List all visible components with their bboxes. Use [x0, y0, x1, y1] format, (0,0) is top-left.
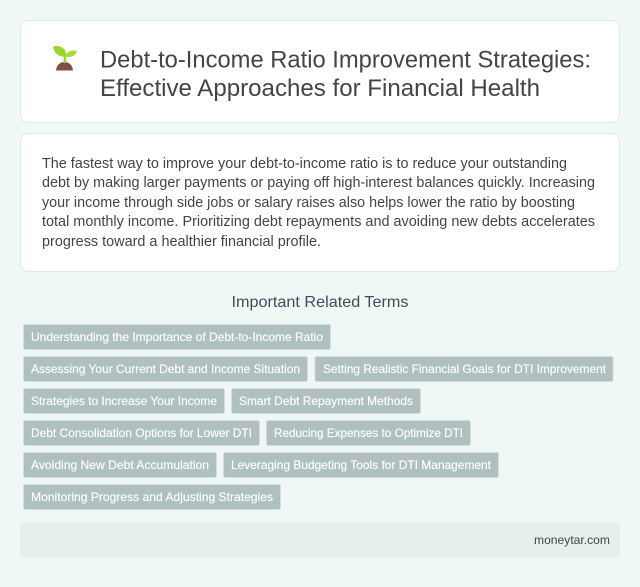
summary text: The fastest way to improve your debt-to-income ratio is to reduce your outstanding	[42, 156, 567, 172]
footer source: moneytar.com	[534, 533, 610, 547]
tag	[266, 420, 470, 446]
tag	[24, 484, 280, 510]
tag: Assessing Your Current Debt and Income Situation	[31, 362, 300, 376]
tag: Leveraging Budgeting Tools for DTI Management	[231, 458, 492, 472]
tag: Debt Consolidation Options for Lower DTI	[31, 426, 252, 440]
summary text: your income through side jobs or salary raises also helps lower the ratio by boosting	[42, 195, 575, 211]
tag: Smart Debt Repayment Methods	[239, 394, 413, 408]
tag: Reducing Expenses to Optimize DTI	[274, 426, 463, 440]
title: Debt-to-Income Ratio Improvement Strategies:	[100, 46, 591, 74]
heading: related terms: Important Related Terms	[232, 294, 408, 311]
icon: seedling	[53, 46, 77, 70]
summary text: debt by making larger payments or paying off high-interest balances quickly. Increasing	[42, 175, 595, 191]
panel: summary card	[20, 134, 620, 272]
tag	[232, 388, 420, 414]
footer	[20, 523, 620, 557]
tag	[224, 452, 498, 478]
tag: Understanding the Importance of Debt-to-Income Ratio	[31, 330, 323, 344]
tag: Strategies to Increase Your Income	[31, 394, 217, 408]
tag: Avoiding New Debt Accumulation	[31, 458, 209, 472]
tag	[24, 356, 308, 382]
tag	[24, 388, 224, 414]
tag: Setting Realistic Financial Goals for DTI Improvement	[323, 362, 607, 376]
tag	[24, 452, 216, 478]
tag	[315, 356, 613, 382]
summary text: progress toward a healthier financial profile.	[42, 234, 321, 250]
panel: header card	[20, 20, 620, 122]
tag: Monitoring Progress and Adjusting Strategies	[31, 490, 273, 504]
tag	[24, 420, 260, 446]
related terms tags	[24, 324, 613, 510]
title: Effective Approaches for Financial Health	[100, 75, 540, 102]
tag	[24, 324, 330, 350]
summary text: total monthly income. Prioritizing debt repayments and avoiding new debts accelerates	[42, 214, 595, 230]
